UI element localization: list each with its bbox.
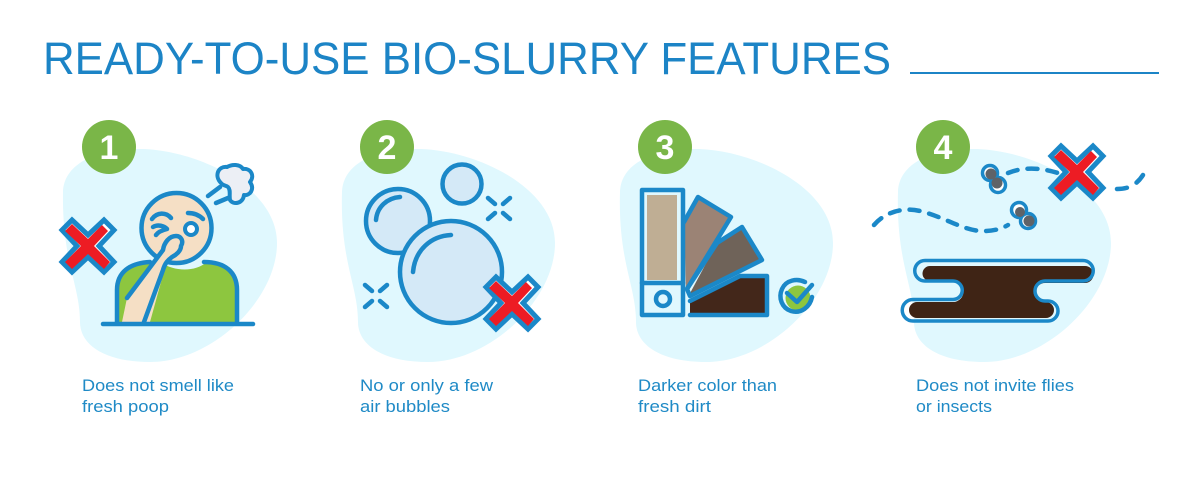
title: READY-TO-USE BIO-SLURRY FEATURES [43, 33, 891, 84]
panel: feature 1 smell [62, 120, 277, 416]
background blob 2 [342, 149, 555, 362]
background blob 1 [63, 149, 277, 362]
caption 3: fresh dirt [638, 398, 711, 416]
icon: medium bubble [366, 189, 430, 253]
icon: red cross 4 [1051, 146, 1103, 198]
panel: feature 4 flies [874, 120, 1143, 416]
caption 3: Darker color than [638, 377, 777, 395]
icon: green check [780, 280, 812, 312]
number badge 4 [916, 120, 970, 174]
icon: fly bottom [1012, 202, 1036, 228]
icon: slurry puddle [902, 260, 1094, 321]
icon: flight path dashes [874, 169, 1143, 231]
icon: sparkle top [488, 198, 510, 219]
number badge 2 [360, 120, 414, 174]
panel: feature 3 colour [620, 120, 833, 416]
title rule [910, 72, 1159, 74]
caption 4: or insects [916, 398, 992, 416]
icon: smell cloud [208, 165, 252, 203]
caption 2: air bubbles [360, 398, 450, 416]
number badge 1: 1 [100, 129, 118, 167]
icon: sparkle bottom [365, 285, 387, 307]
icon: small bubble [442, 164, 482, 204]
background blob 3 [620, 149, 833, 362]
background blob 4 [898, 149, 1111, 362]
number badge 3 [638, 120, 692, 174]
icon: fly top [982, 166, 1006, 192]
panel: feature 2 bubbles [342, 120, 555, 416]
caption 1: Does not smell like [82, 377, 234, 395]
caption 4: Does not invite flies [916, 377, 1074, 395]
caption 2: No or only a few [360, 377, 493, 395]
icon: red cross 2 [486, 277, 538, 329]
number badge 4: 4 [934, 129, 953, 167]
icon: large bubble [400, 221, 502, 323]
caption 1: fresh poop [82, 398, 169, 416]
number badge 2: 2 [378, 129, 396, 167]
icon: person holding nose [103, 193, 253, 324]
icon: colour swatch fan [642, 190, 767, 315]
icon: red cross 1 [62, 220, 114, 272]
number badge 1 [82, 120, 136, 174]
number badge 3: 3 [656, 129, 674, 167]
